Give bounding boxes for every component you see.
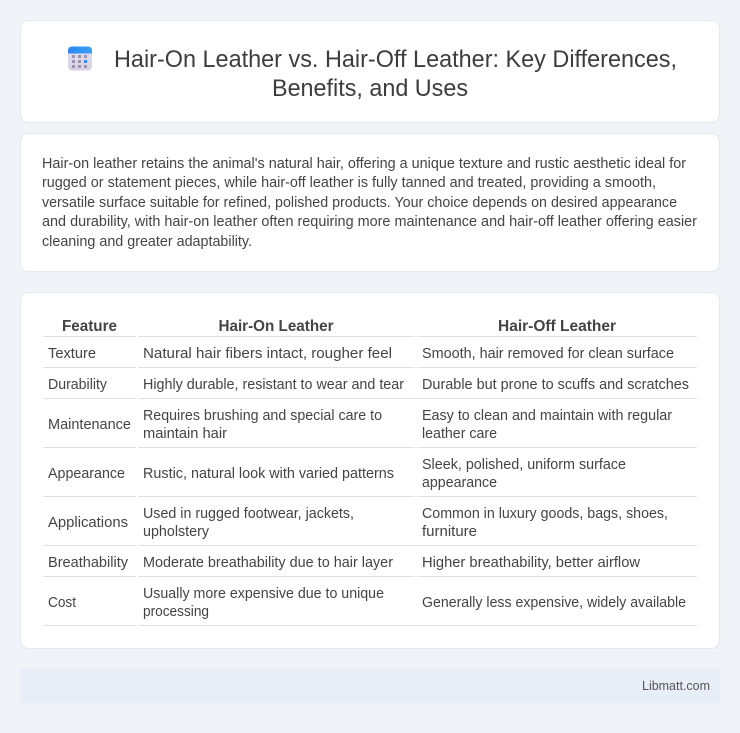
text block: introduction: Hair-on leather retains the animal's natural hair, offering a unique texture and rustic aesthetic ideal for [42, 156, 686, 172]
row: texture: Smooth, hair removed for clean surface [422, 346, 674, 362]
row: maintenance [48, 408, 672, 442]
table heading row [62, 318, 616, 335]
row: breathability: Breathability [48, 555, 129, 571]
row: maintenance: maintain hair [143, 426, 227, 442]
row: applications: Common in luxury goods, bags, shoes, [422, 506, 668, 522]
row: texture: Texture [48, 346, 96, 362]
row: appearance: appearance [422, 475, 497, 491]
row: durability [48, 377, 689, 393]
row: texture [48, 346, 674, 362]
row: applications [48, 506, 668, 540]
panel: introduction [20, 134, 720, 272]
table heading row: Hair-On Leather [218, 318, 334, 335]
row: maintenance: Maintenance [48, 417, 131, 433]
title [114, 46, 677, 102]
text block: introduction [42, 156, 697, 250]
row: applications: Used in rugged footwear, jackets, [143, 506, 354, 522]
icon: calendar [68, 46, 92, 70]
row: breathability: Higher breathability, better airflow [422, 555, 640, 571]
row: breathability [48, 555, 640, 571]
row: maintenance: Requires brushing and special care to [143, 408, 382, 424]
text block: introduction: and durability, with hair-on leather often requiring more maintenance and hair-off leather offering easier [42, 214, 697, 230]
row: durability: Durable but prone to scuffs and scratches [422, 377, 689, 393]
panel: header [20, 20, 720, 122]
title: Hair-On Leather vs. Hair-Off Leather: Key Differences, [114, 46, 677, 73]
row: maintenance: Easy to clean and maintain with regular [422, 408, 672, 424]
row: cost: processing [143, 604, 209, 620]
row: durability: Highly durable, resistant to wear and tear [143, 377, 404, 393]
row: maintenance: leather care [422, 426, 497, 442]
text block: introduction: versatile surface suitable for refined, polished products. Your choice depends on desired appearance [42, 195, 677, 211]
row: appearance [48, 457, 626, 491]
row: breathability: Moderate breathability due to hair layer [143, 555, 393, 571]
row: applications: Applications [48, 515, 128, 531]
footer [20, 669, 720, 703]
panel: comparison table [20, 292, 720, 648]
text block: introduction: rugged or statement pieces, while hair-off leather is fully tanned and treated, providing a smooth, [42, 175, 656, 191]
row: applications: furniture [422, 524, 477, 540]
row: applications: upholstery [143, 524, 210, 540]
row: durability: Durability [48, 377, 108, 393]
row: appearance: Sleek, polished, uniform surface [422, 457, 626, 473]
title: Benefits, and Uses [272, 75, 468, 102]
row: texture: Natural hair fibers intact, rougher feel [143, 346, 392, 362]
table heading row: Feature [62, 318, 117, 335]
row: cost: Cost [48, 595, 76, 611]
table heading row: Hair-Off Leather [498, 318, 616, 335]
row: cost [48, 586, 686, 620]
text block: introduction: cleaning and greater adaptability. [42, 234, 252, 250]
row: cost: Generally less expensive, widely available [422, 595, 686, 611]
footer: Libmatt.com [642, 679, 710, 693]
row: appearance: Appearance [48, 466, 125, 482]
row: appearance: Rustic, natural look with varied patterns [143, 466, 394, 482]
row: cost: Usually more expensive due to unique [143, 586, 384, 602]
